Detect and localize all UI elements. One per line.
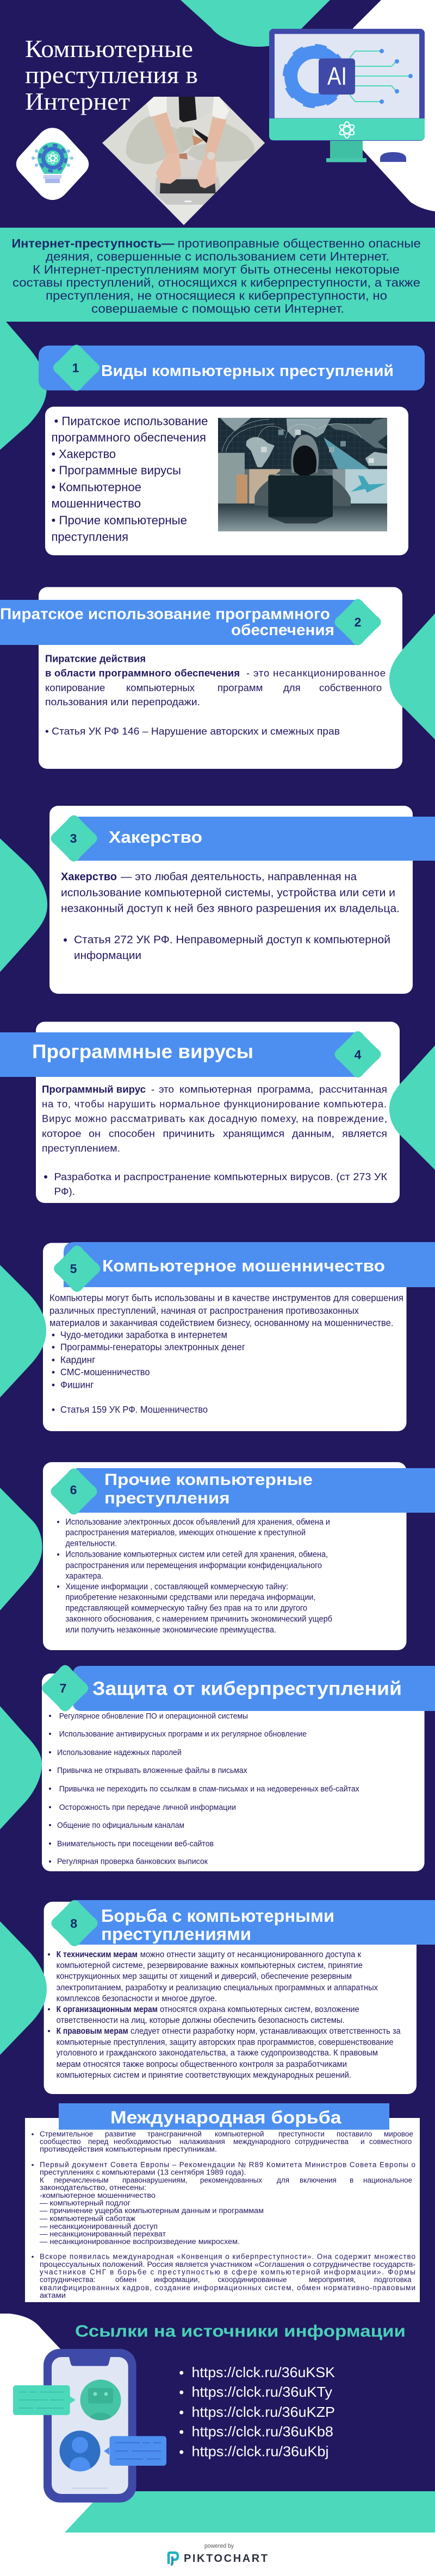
panel 1 list: • Прочие компьютерные (51, 513, 187, 527)
user avatar (60, 2431, 100, 2471)
panel 9 text: законодательство, отнесены: (40, 2183, 146, 2192)
panel 7 heading: Защита от киберпреступлений (92, 1678, 402, 1700)
decorative teal band bottom (65, 2491, 435, 2533)
panel 6 heading: Прочие компьютерные (104, 1471, 313, 1489)
panel 9 text: — несанкционированное воспроизведение микросхем. (40, 2237, 240, 2246)
panel 8 text: К правовым мерам (57, 2027, 128, 2036)
panel 9 text: перечисленным (54, 2176, 109, 2184)
icon: light bulb with gear in white diamond (16, 128, 89, 200)
panel 9 text: — несанкционированный доступ (40, 2222, 158, 2230)
decorative white shape bottom left (0, 2314, 109, 2533)
panel 2 card (39, 587, 402, 769)
source links: https://clck.ru/36uKTy (191, 2384, 332, 2400)
panel 9 text: сотрудничества (295, 2138, 349, 2146)
teal speech bubble (13, 2385, 76, 2415)
panel 2 heading: обеспечения (231, 622, 334, 639)
panel 3 text: использование компьютерной системы, устройства или сети и (61, 887, 395, 899)
panel 9 text: участников СНГ в борьбе с преступностью в сфере компьютерной информации». Формы (40, 2268, 415, 2276)
panel 9 text: необходимостью (114, 2138, 171, 2146)
panel 9 text: международного (233, 2138, 290, 2146)
panel 4 text: Программный вирус (42, 1083, 146, 1095)
panel 6 text: законного обоснования, с намерением причинить экономический ущерб (65, 1615, 332, 1624)
photo: hooded hacker at laptop (218, 418, 387, 531)
panel 1 header bar (39, 346, 425, 390)
panel 9 text: обмен (115, 2276, 136, 2284)
decorative teal blob left 3 (0, 1265, 46, 1397)
source links: https://clck.ru/36uKb8 (191, 2423, 333, 2440)
panel 6 text: представляющей коммерческую тайну без прав на то или другого (65, 1604, 307, 1613)
panel 8 card (44, 1902, 417, 2094)
panel 4 text (42, 1083, 387, 1197)
badge 5 (54, 1245, 100, 1292)
panel 5 text: Компьютеры могут быть использованы и в качестве инструментов для совершения (49, 1292, 403, 1303)
panel 1 heading: Виды компьютерных преступлений (101, 362, 394, 380)
panel 9 text (32, 2130, 415, 2299)
panel 2 text: в области программного обеспечения (45, 667, 240, 679)
panel 4 text: на то, чтобы нарушить нормальное функционирование компьютера. (42, 1098, 387, 1110)
panel 9 text: правонарушениям, (122, 2176, 188, 2184)
panel 4 text: Вирус можно рассматривать как досадную помеху, на повреждение, (42, 1113, 387, 1124)
illustration: monitor with AI gear (269, 29, 425, 162)
panel 1 list: мошенничество (51, 497, 141, 510)
badge 1: 1 (72, 361, 79, 375)
panel 9 text: включения (300, 2176, 337, 2184)
panel 9 text: — компьютерный подлог (40, 2199, 130, 2207)
decorative teal blob left 2 (0, 838, 47, 972)
panel 9 text: противодействия компьютерным преступникам. (40, 2145, 217, 2153)
panel 7 header bar (73, 1666, 435, 1711)
panel 2 text: пользования или перепродажи. (45, 696, 200, 707)
panel 2 header bar (0, 600, 356, 645)
photo: person typing on laptop in diamond (102, 97, 265, 225)
panel 4 text: РФ). (54, 1186, 75, 1197)
panel 8 text: электропитанием, разработку и реализацию специальных программных и аппаратных (57, 1983, 378, 1992)
panel 8 text: следует отнести разработку норм, устанавливающих ответственность за (130, 2027, 401, 2036)
panel 5 text: СМС-мошенничество (60, 1367, 150, 1377)
panel 2 text: Пиратские действия (45, 653, 146, 664)
panel 8 text: комплексов безопасности и многое другое. (57, 1994, 217, 2003)
panel 1 list: • Хакерство (51, 447, 116, 461)
panel 6 text: или получить незаконные экономические преимущества. (65, 1626, 276, 1634)
panel 9 text: мировое (384, 2130, 413, 2138)
panel 8 text: мерам относятся также вопросы общественного контроля за разработчиками (57, 2060, 347, 2069)
intro band (0, 228, 435, 322)
source links: https://clck.ru/36uKZP (191, 2404, 335, 2420)
panel 4 text: преступлением. (42, 1142, 120, 1154)
panel 2 text: для (283, 682, 301, 693)
panel 6 text: характера. (65, 1571, 103, 1581)
panel 9 text: — причинение ущерба компьютерным данным и программам (40, 2207, 264, 2215)
panel 9 text: — несанкционированный перехват (40, 2230, 166, 2238)
intro text: противоправные общественно опасные (177, 237, 421, 250)
panel 9 text: и (361, 2138, 365, 2146)
panel 8 text: компьютерные преступления, защиту авторских прав программистов, совершенствование (57, 2038, 394, 2047)
panel 4 text: - (151, 1083, 154, 1095)
panel 9 text: — компьютерный саботаж (40, 2215, 135, 2222)
panel 7 list: Использование надежных паролей (57, 1748, 182, 1757)
panel 3 text: незаконный доступ к ней без явного разрешения их владельца. (61, 903, 400, 915)
panel 9 text: скоординированные (217, 2276, 287, 2284)
panel 4 text: которое (42, 1128, 82, 1139)
panel 8 text (48, 1950, 401, 2080)
panel 8 text: уголовного и гражданского законодательства, а также судопроизводства. К правовым (57, 2048, 378, 2058)
badge 2 (335, 599, 381, 645)
panel 6 text (57, 1518, 332, 1634)
panel 9 text: мероприятия, (309, 2276, 356, 2284)
panel 9 card (25, 2118, 420, 2302)
panel 1 list: • Компьютерное (51, 480, 141, 494)
panel 1 list: • Программные вирусы (51, 463, 181, 477)
intro text: Интернет-преступность— (12, 237, 174, 250)
badge 3 (51, 815, 97, 862)
panel 6: other crimes (0, 1462, 435, 1650)
panel 9 text: актами (40, 2291, 66, 2299)
intro text: деяния, совершенные с использованием сети Интернет. (46, 250, 389, 263)
panel 6 text: Хищение информации , составляющей коммерческую тайну: (65, 1582, 288, 1591)
panel 4 text: данным, (292, 1128, 334, 1139)
panel 4 text: компьютерная (179, 1083, 252, 1095)
panel 8 text: можно отнести защиту от несанкционированного доступа к (140, 1950, 361, 1959)
panel 5 text: различных преступлений, начиная от распространения противозаконных (49, 1305, 359, 1316)
panel 9 text: компьютерной (215, 2130, 264, 2138)
badge 4 (335, 1031, 381, 1077)
panel 4: viruses (0, 1021, 435, 1203)
panel 3 card (49, 806, 413, 994)
decorative teal blob left 5 (0, 1706, 42, 1829)
panel 7 list (49, 1712, 359, 1866)
badge 8: 8 (70, 1916, 77, 1931)
panel 6 text: Использование электронных досок объявлений для хранения, обмена и (65, 1518, 330, 1527)
panel 4 text: он (89, 1128, 101, 1139)
decorative teal blob left 6 (0, 1921, 47, 2055)
intro text (12, 237, 421, 315)
panel 9 text: в (350, 2176, 353, 2184)
panel 4 card (36, 1021, 400, 1203)
panel 7 list: Внимательность при посещении веб-сайтов (57, 1839, 214, 1848)
panel 9 text: поставило (337, 2130, 372, 2138)
panel 5 text: Программы-генераторы электронных денег (60, 1342, 245, 1352)
panel 1: types of crimes (39, 344, 425, 555)
panel 7 list: Регулярная проверка банковских выписок (57, 1857, 208, 1866)
panel 5 text: Статья 159 УК РФ. Мошенничество (60, 1404, 208, 1415)
panel 8 header bar (76, 1900, 435, 1945)
illustration: monitor with AI gear: AI (327, 62, 347, 90)
panel 9 text: информации, (154, 2276, 200, 2284)
panel 2 text: • Статья УК РФ 146 – Нарушение авторских и смежных прав (45, 725, 340, 737)
panel 3 text (61, 871, 400, 962)
panel 9 text: преступности (278, 2130, 325, 2138)
panel 3 header bar (76, 817, 435, 861)
panel 9 heading: Международная борьба (110, 2108, 341, 2127)
title: преступления в (25, 61, 198, 89)
panel 9: international fight (25, 2103, 420, 2302)
panel 9 text: для (277, 2176, 289, 2184)
panel 5: computer fraud (0, 1242, 435, 1431)
decorative teal blob right 2 (389, 1045, 435, 1170)
blue speech bubble (104, 2436, 166, 2466)
panel 6 header bar (76, 1468, 435, 1513)
panel 9 text: налаживания (179, 2138, 225, 2146)
panel 7 list: Привычка не открывать вложенные файлы в письмах (57, 1766, 247, 1775)
badge 6 (51, 1468, 97, 1515)
panel 4 text: является (342, 1128, 387, 1139)
badge 4: 4 (355, 1048, 362, 1062)
panel 7 list: Привычка не переходить по ссылкам в спам-письмах и на недоверенных веб-сайтах (59, 1784, 359, 1794)
intro text: совершаемые с помощью сети Интернет. (91, 302, 344, 315)
title: Компьютерные (25, 35, 193, 62)
panel 6 text: распространения или перемещения информации конфиденциального (65, 1561, 322, 1570)
panel 9 text: рекомендованных (200, 2176, 262, 2184)
panel 9 text: сотрудничества: (40, 2276, 96, 2284)
panel 5 heading: Компьютерное мошенничество (102, 1256, 385, 1275)
badge 7 (42, 1665, 88, 1712)
panel 9 text: сообщество (40, 2138, 81, 2146)
panel 5 text: Кардинг (60, 1354, 96, 1365)
panel 3 text: информации (74, 950, 141, 962)
panel 8 text: компьютерных систем и принятие соответствующих международных решений. (57, 2071, 351, 2080)
panel 1 card (45, 406, 408, 555)
panel 9 text: перед (88, 2138, 109, 2146)
panel 8 heading: преступлениями (101, 1925, 251, 1944)
intro text: составы преступлений, относящихся к киберпреступности, а также (13, 276, 420, 289)
panel 1 list: программного обеспечения (51, 430, 206, 444)
panel 8: fighting crimes (0, 1900, 435, 2094)
panel 2 text: компьютерных (126, 682, 195, 693)
title: Интернет (25, 87, 130, 115)
panel 7 list: Осторожность при передаче личной информации (59, 1803, 236, 1812)
footer: powered by: powered by (204, 2543, 234, 2549)
decorative teal blob top (181, 0, 330, 47)
panel 1 list: • Пиратское использование (54, 414, 208, 428)
panel 9 text: трансграничной (147, 2130, 202, 2138)
panel 3 text: — это любая деятельность, направленная на (121, 871, 357, 883)
panel 2 text: программ (217, 682, 263, 693)
panel 9 text: развитие (105, 2130, 136, 2138)
panel 4 heading: Программные вирусы (32, 1040, 253, 1063)
panel 8 text: ответственности на лиц, которые должны обеспечить безопасность системы. (57, 2016, 345, 2025)
panel 8 text: относятся охрана компьютерных систем, возложение (160, 2005, 359, 2014)
badge 1 (53, 344, 100, 391)
panel 2 heading (0, 605, 334, 639)
panel 9 text: К (40, 2176, 44, 2184)
panel 4 text: программа, (257, 1083, 313, 1095)
panel 6 text: приобретение незаконными средствами или передача информации, (65, 1593, 315, 1602)
panel 3 heading: Хакерство (109, 828, 202, 847)
panel 9 text: -компьютерное мошенничество (40, 2191, 156, 2199)
panel 5 text (49, 1292, 403, 1415)
panel 6 card (43, 1462, 407, 1650)
panel 8 text: конструкционных мер защиты от хищений и диверсий, обеспечение резервным (57, 1972, 352, 1981)
panel 5 text: материалов и заканчивая содействием бизнесу, основанному на мошенничестве. (49, 1317, 394, 1328)
source links (179, 2364, 335, 2459)
panel 5 text: Фишинг (60, 1379, 94, 1390)
panel 9 text: подготовка (374, 2276, 412, 2284)
panel 6 text: деятельности. (65, 1539, 117, 1549)
panel 7: protection (0, 1665, 435, 1871)
decorative teal blob left 4 (0, 1488, 42, 1610)
badge 3: 3 (70, 831, 77, 845)
panel 1 list: преступления (51, 530, 128, 543)
panel 4 text: Разработка и распространение компьютерных вирусов. (ст 273 УК (54, 1171, 387, 1182)
panel 5 card (43, 1243, 407, 1431)
illustration: phone chat (13, 2349, 166, 2503)
panel 9 header bar (59, 2103, 389, 2130)
panel 9 text: Стремительное (40, 2130, 93, 2138)
panel 4 text: причинить (163, 1128, 215, 1139)
panel 3 text: Статья 272 УК РФ. Неправомерный доступ к компьютерной (74, 934, 390, 946)
panel 4 text: способен (109, 1128, 155, 1139)
panel 4 text: хранящимся (223, 1128, 284, 1139)
panel 8 heading (101, 1906, 334, 1944)
badge 7: 7 (60, 1681, 66, 1695)
badge 5: 5 (70, 1262, 77, 1276)
panel 8 text: К техническим мерам (57, 1950, 138, 1959)
source links: https://clck.ru/36uKSK (191, 2364, 335, 2380)
title (25, 35, 198, 115)
panel 9 text: Вскоре появилась международная «Конвенция о киберпреступности». Она содержит множество (40, 2253, 415, 2260)
panel 9 text: совместного (369, 2138, 412, 2146)
panel 2 text: собственного (319, 682, 382, 693)
panel 6 text: Использование компьютерных систем или сетей для хранения, обмена, (65, 1550, 328, 1559)
panel 9 text: преступлениях с компьютерами (13 сентября 1989 года). (40, 2168, 246, 2177)
badge 6: 6 (70, 1483, 77, 1497)
panel 2: software piracy (0, 587, 435, 769)
panel 2 text: копирование (45, 682, 105, 693)
panel 8 heading: Борьба с компьютерными (101, 1906, 334, 1926)
panel 4 header bar (0, 1032, 356, 1077)
panel 8 text: К организационным мерам (57, 2005, 158, 2014)
panel 6 heading: преступления (104, 1489, 229, 1507)
panel 7 list: Общение по официальным каналам (57, 1821, 184, 1830)
badge 8 (51, 1900, 98, 1946)
decorative white shape top right (326, 0, 435, 211)
panel 3: hacking (49, 806, 435, 994)
intro text: К Интернет-преступлениям могут быть отнесены некоторые (33, 263, 400, 276)
panel 6 heading (104, 1471, 313, 1507)
panel 2 text (45, 653, 386, 737)
panel 4 text: это (159, 1083, 174, 1095)
panel 2 text: - это несанкционированное (246, 667, 386, 679)
intro text: преступления, не относящиеся к киберпреступности, но (46, 289, 387, 302)
panel 5 header bar (64, 1242, 435, 1287)
panel 9 text: процессуальных положений. Россия является участником «Соглашения о сотрудничестве государств- (40, 2260, 415, 2268)
panel 5 text: Чудо-методики заработка в интернетем (60, 1329, 227, 1340)
source links: https://clck.ru/36uKbj (191, 2443, 328, 2459)
panel 9 text: национальное (363, 2176, 412, 2184)
panel 6 text: распространения материалов, имеющих отношение к преступной (65, 1528, 306, 1538)
robot avatar (80, 2380, 121, 2420)
panel 3 text: Хакерство (61, 871, 117, 883)
panel 4 text: рассчитанная (319, 1083, 387, 1095)
sources heading: Ссылки на источники информации (75, 2321, 406, 2341)
panel 8 text: компьютерной системе, резервирование важных компьютерных систем, принятие (57, 1961, 363, 1970)
panel 9 text: Первый документ Совета Европы – Рекомендации № R89 Комитета Министров Совета Европы о (40, 2160, 415, 2169)
panel 2 heading: Пиратское использование программного (0, 605, 330, 623)
badge 2: 2 (355, 615, 361, 629)
decorative teal blob left 1 (0, 322, 47, 450)
panel 7 list: Использование антивирусных программ и их регулярное обновление (59, 1729, 307, 1739)
panel 7 list: Регулярное обновление ПО и операционной системы (59, 1712, 248, 1721)
decorative teal blob right 1 (389, 613, 435, 739)
footer: Piktochart logo: PIKTOCHART (184, 2553, 268, 2565)
panel 7 card (42, 1674, 425, 1871)
panel 9 text: квалифицированных кадров, создание информационных систем, обмен нормативно-правовыми (40, 2284, 415, 2292)
panel 1 list (51, 414, 208, 543)
